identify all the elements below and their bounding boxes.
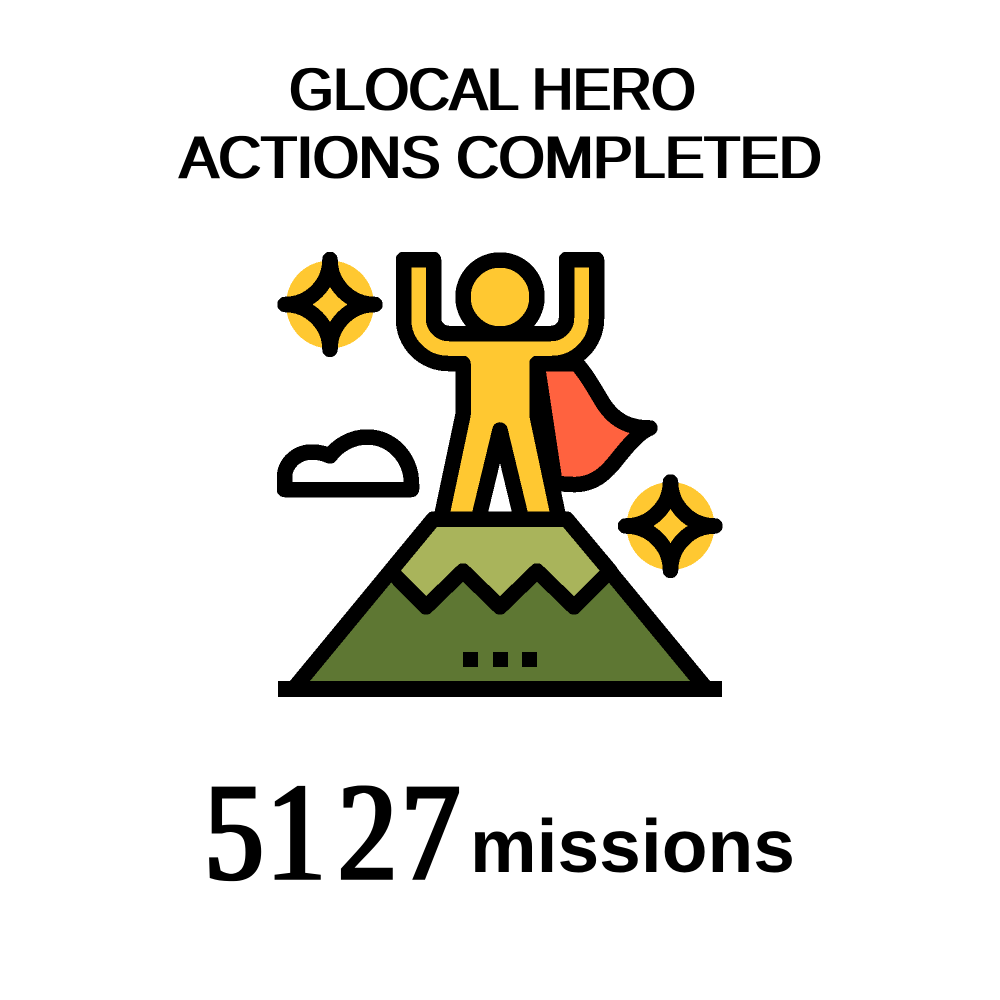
icon: hero on mountain bbox=[278, 260, 722, 697]
mountain lower slope bbox=[293, 519, 707, 689]
mission count bbox=[205, 754, 795, 909]
icon: mountain bbox=[278, 519, 722, 697]
title: ACTIONS COMPLETED bbox=[180, 124, 822, 191]
number: 5127: 5127 bbox=[205, 754, 460, 909]
title bbox=[180, 56, 822, 191]
title: GLOCAL HERO bbox=[290, 56, 696, 123]
icon: hero head bbox=[463, 260, 537, 334]
mountain snow cap bbox=[391, 519, 610, 607]
icon: cloud bbox=[284, 437, 412, 490]
icon: hero body bbox=[404, 260, 596, 519]
icon: upper left sparkle bbox=[285, 260, 375, 350]
mountain base line bbox=[278, 681, 722, 697]
icon: lower right sparkle bbox=[626, 482, 715, 570]
icon: red cape bbox=[537, 364, 650, 485]
unit: missions: missions bbox=[470, 804, 795, 888]
mountain dots bbox=[463, 652, 537, 667]
